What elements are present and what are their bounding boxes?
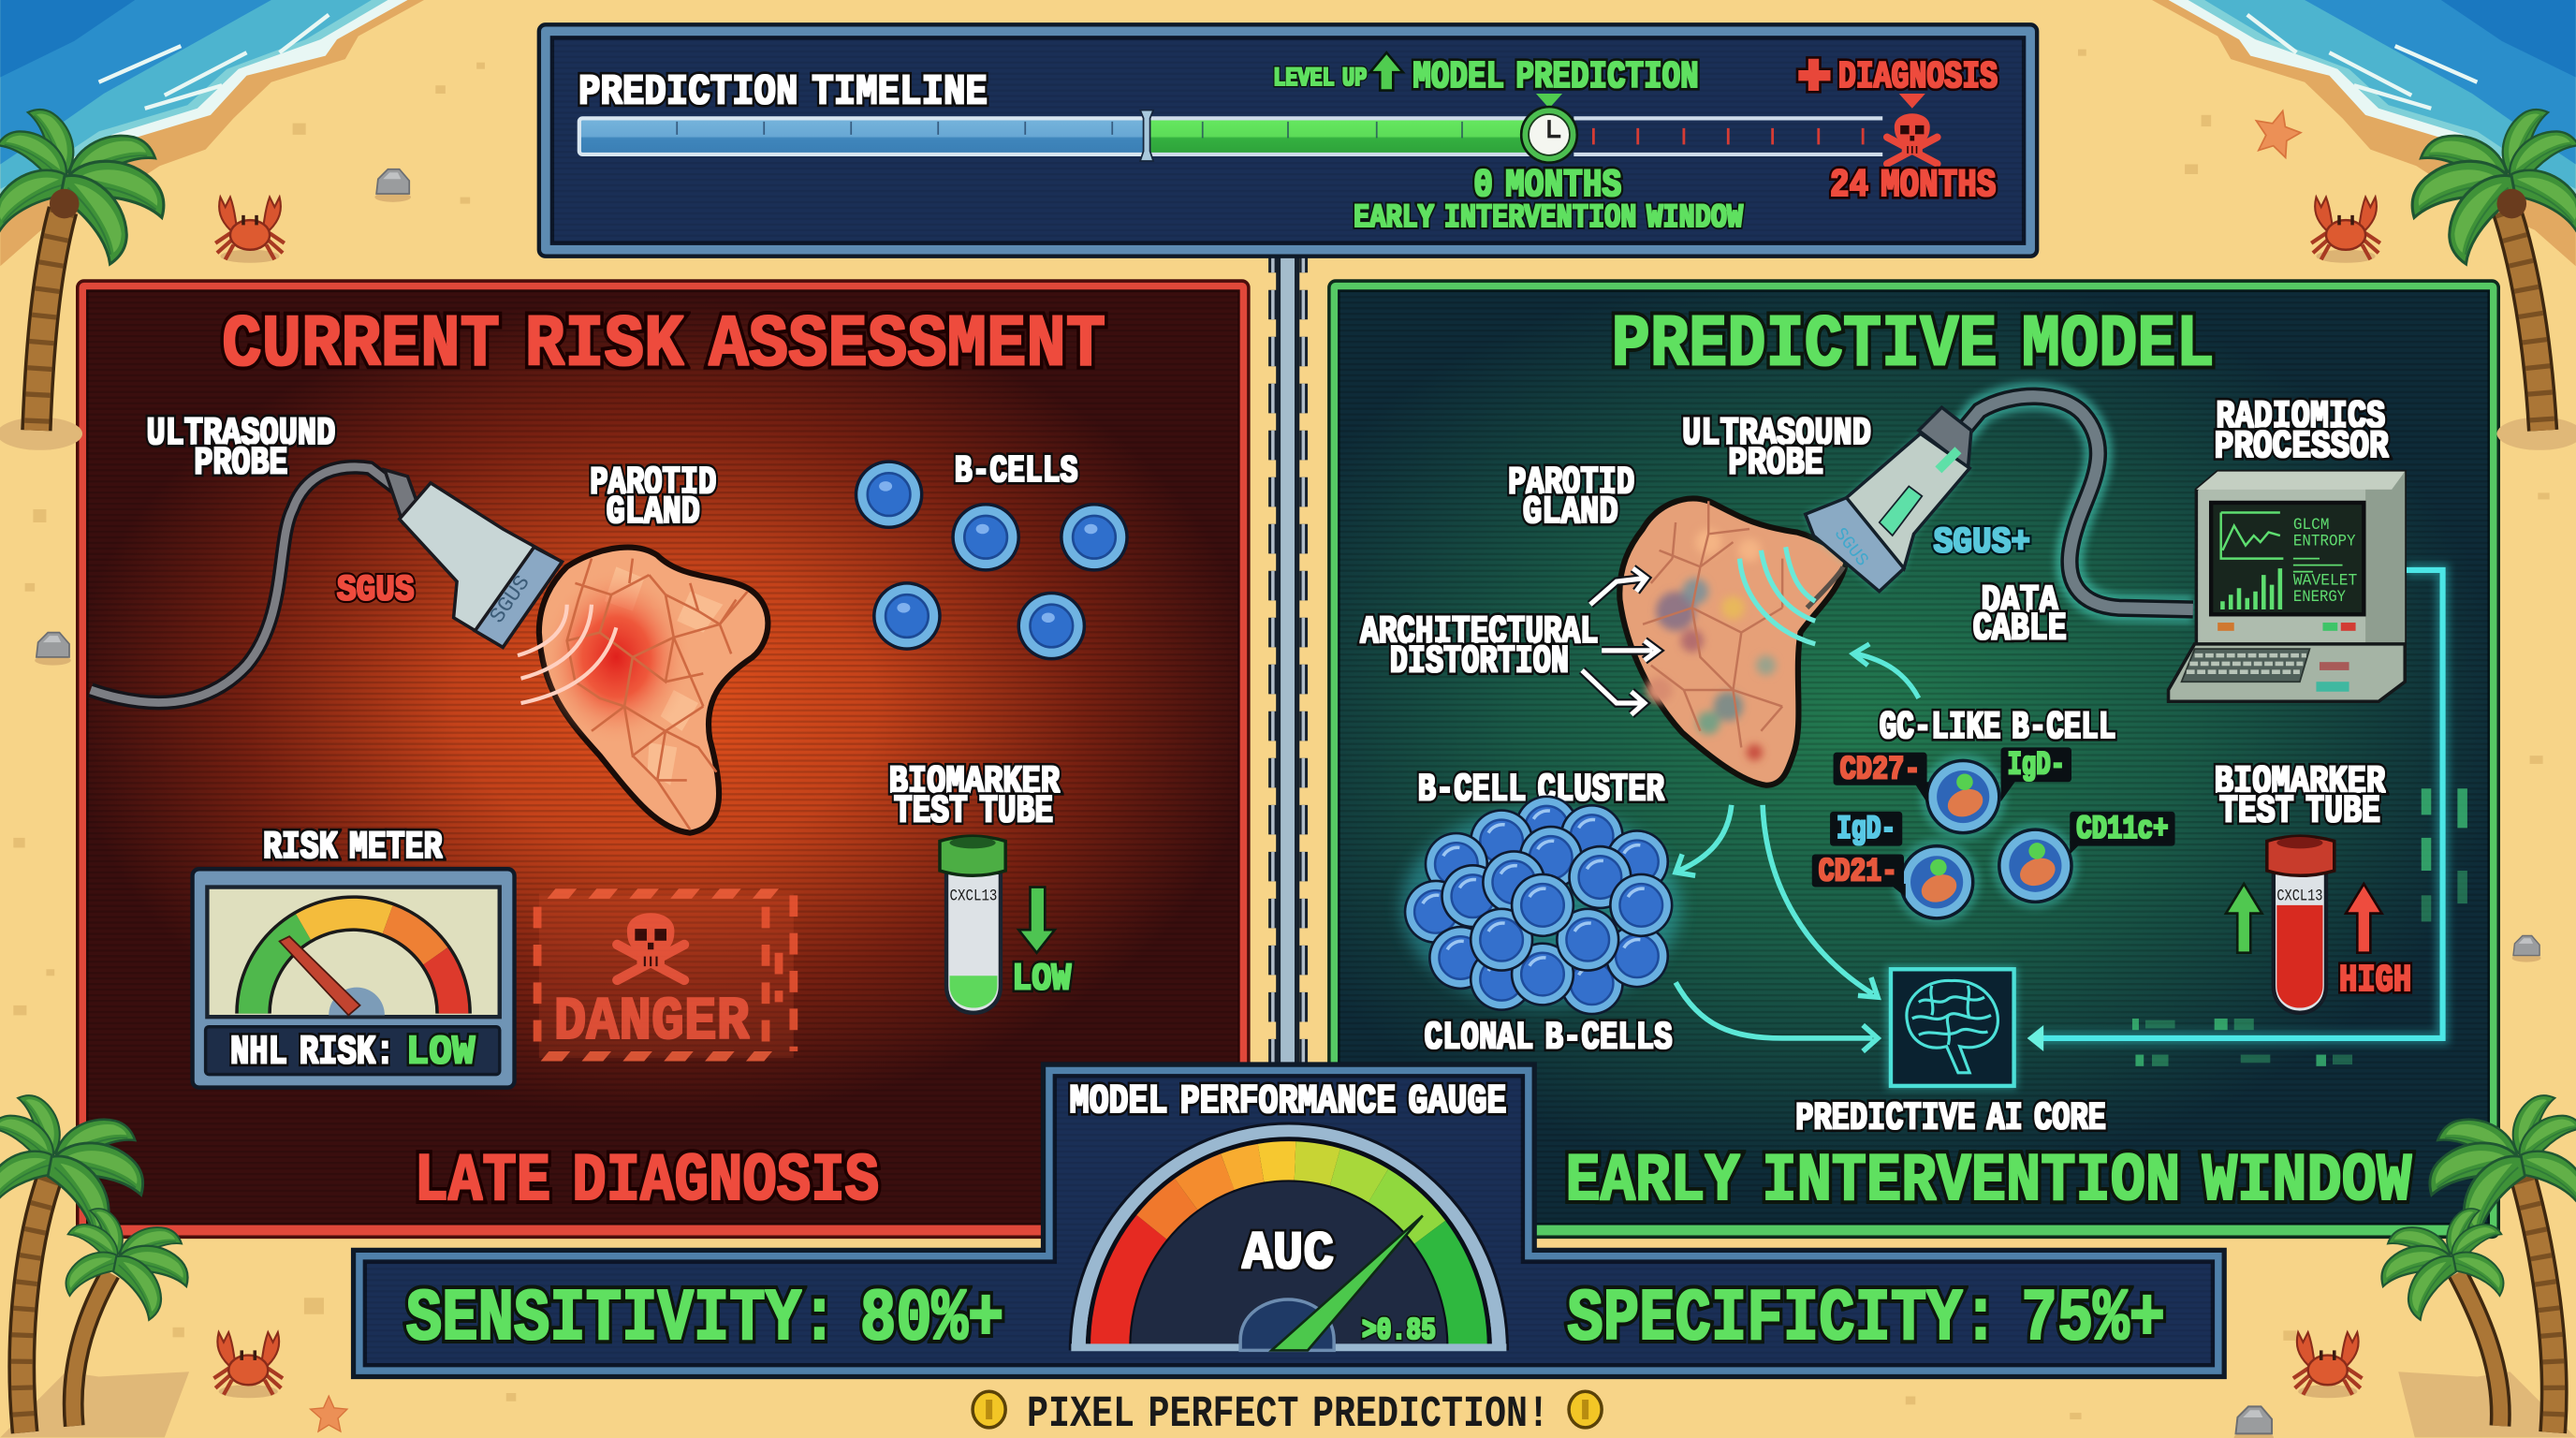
heading: current risk assessment: CURRENT RISK ASSESSMENT [222, 303, 1105, 388]
panel: prediction timeline [539, 24, 2037, 257]
tag: CD11c+ [2070, 811, 2175, 854]
label: risk meter: RISK METER [263, 825, 443, 870]
icon: test tube low: CXCL13 [950, 888, 997, 906]
label: biomarker test tube: BIOMARKER [2215, 759, 2386, 804]
icon: radiomics computer: WAVELET [2293, 572, 2357, 591]
data bits [2132, 788, 2467, 1066]
marker: diagnosis [1899, 94, 1925, 109]
label: radiomics processor: RADIOMICS [2216, 394, 2385, 439]
GC-like b-cells [1894, 754, 2078, 925]
label: ultrasound probe: ULTRASOUND [1682, 411, 1871, 456]
tag: IgD- cyan: IgD- [1837, 811, 1895, 848]
label: SGUS: SGUS [337, 569, 414, 610]
icon: b-cells [855, 460, 1129, 660]
tag: CD27- [1834, 752, 1928, 805]
icon: radiomics computer: GLCM [2293, 516, 2329, 535]
icon: predictive AI core [1886, 966, 2017, 1089]
label: architectural distortion [1360, 609, 1599, 684]
icon: ultrasound probe: SGUS [485, 571, 535, 628]
heading: predictive model: PREDICTIVE MODEL [1612, 303, 2215, 388]
arrow: red up [2346, 884, 2382, 953]
danger warning: DANGER [554, 989, 749, 1057]
icon: clock [1521, 107, 1577, 163]
label: early intervention window: EARLY INTERVENTION WINDOW [1354, 199, 1744, 237]
metric: sensitivity: SENSITIVITY: 80%+ [406, 1277, 1003, 1361]
label: NHL risk low: NHL RISK: [230, 1029, 394, 1076]
AUC gauge [1071, 1132, 1506, 1351]
risk meter [193, 869, 515, 1088]
tag: IgD- green: IgD- [2008, 746, 2065, 784]
arrow: green up [2226, 884, 2262, 953]
icon: ultrasound probe glowing [1806, 407, 1971, 592]
footer: late diagnosis: LATE DIAGNOSIS [414, 1143, 879, 1220]
label: high: HIGH [2339, 960, 2411, 1003]
panel: current risk assessment [78, 281, 1249, 1237]
label: radiomics processor: PROCESSOR [2215, 424, 2389, 469]
label: parotid gland [590, 460, 716, 535]
label: 24 months: 24 MONTHS [1830, 163, 1996, 208]
vertical connector chain [1273, 243, 1304, 1068]
label: ultrasound probe: ULTRASOUND [146, 411, 335, 456]
label: 0 months: 0 MONTHS [1473, 163, 1621, 208]
tag: IgD- green [2001, 746, 2071, 801]
panel: predictive model [1329, 281, 2498, 1237]
label: parotid gland [1508, 460, 1634, 535]
footer: early intervention window: EARLY INTERVENTION WINDOW [1566, 1143, 2412, 1220]
marker: model prediction [1536, 94, 1562, 109]
label: biomarker test tube [2215, 759, 2386, 833]
icon: test tube low [940, 836, 1005, 1013]
icon: level up arrow [1370, 52, 1403, 91]
danger warning [537, 888, 794, 1062]
panel: model performance [354, 1064, 2224, 1376]
label: ultrasound probe: PROBE [1728, 440, 1823, 485]
label: parotid gland: PAROTID [1508, 460, 1634, 505]
heading: prediction timeline: PREDICTION TIMELINE [578, 68, 988, 117]
icon: diagnosis skull [1887, 113, 1938, 164]
icon: radiomics computer [2169, 472, 2405, 701]
label: ultrasound probe: PROBE [194, 440, 287, 485]
label: biomarker test tube: TEST TUBE [2219, 788, 2380, 833]
icon: radiomics computer: ENTROPY [2293, 533, 2356, 551]
label: ultrasound probe [146, 411, 335, 485]
data line to AI core [2027, 570, 2443, 1051]
icon: coin right [1569, 1391, 1602, 1428]
metric: specificity: SPECIFICITY: 75%+ [1567, 1277, 2165, 1361]
label: parotid gland: GLAND [1523, 490, 1618, 535]
arrows: architectural distortion [1582, 568, 1658, 714]
label: biomarker test tube: TEST TUBE [894, 788, 1053, 833]
tag: CD21-: CD21- [1819, 854, 1897, 891]
palm trees: bottom left [0, 1087, 195, 1437]
icon: ultrasound probe [385, 470, 562, 647]
palm trees: bottom right [2375, 1087, 2576, 1437]
timeline bar [579, 110, 1882, 161]
arrows to AI core [1676, 805, 1878, 1051]
label: architectural distortion: DISTORTION [1390, 639, 1569, 684]
icon: parotid gland distorted [1619, 499, 1847, 785]
label: parotid gland: PAROTID [590, 460, 716, 505]
arrow: low [1018, 888, 1055, 953]
label: data cable [1973, 579, 2067, 652]
label: SGUS+: SGUS+ [1934, 522, 2030, 564]
palm tree: top right [2403, 100, 2576, 450]
label: data cable: DATA [1981, 579, 2059, 624]
label: predictive AI core: PREDICTIVE AI CORE [1795, 1095, 2106, 1140]
ocean: top left [0, 0, 424, 266]
label: b-cells: B-CELLS [955, 450, 1077, 493]
icon: radiomics computer: ENERGY [2293, 588, 2346, 607]
label: ultrasound probe [1682, 411, 1871, 485]
data cable [1954, 396, 2193, 609]
label: architectural distortion: ARCHITECTURAL [1360, 609, 1599, 654]
icon: test tube high: CXCL13 [2276, 888, 2322, 906]
label: biomarker test tube: BIOMARKER [889, 759, 1061, 804]
label: parotid gland: GLAND [607, 490, 700, 535]
icon: diagnosis plus [1797, 57, 1832, 92]
label: greater than 0.85: >0.85 [1362, 1313, 1436, 1349]
icon: b-cell cluster [1401, 795, 1680, 1015]
ocean: top right [2152, 0, 2576, 266]
label: model prediction: MODEL PREDICTION [1412, 56, 1699, 99]
arrow: cell to gland [1853, 644, 1919, 698]
label: clonal b-cells: CLONAL B-CELLS [1425, 1016, 1673, 1061]
palm tree: top left [0, 100, 173, 450]
label: b-cell cluster: B-CELL CLUSTER [1418, 768, 1664, 813]
gauge needle [1271, 1215, 1423, 1350]
heading: model performance gauge: MODEL PERFORMANCE GAUGE [1070, 1078, 1506, 1125]
label: NHL risk low: LOW [406, 1029, 476, 1076]
icon: parotid gland [518, 548, 768, 833]
label: biomarker test tube [889, 759, 1061, 833]
label: low: LOW [1012, 958, 1072, 1001]
label: level up: LEVEL UP [1273, 65, 1367, 94]
label: radiomics processor [2215, 394, 2389, 469]
tag: CD11c+: CD11c+ [2076, 811, 2169, 848]
icon: coin left [973, 1391, 1005, 1428]
probe cable [91, 467, 398, 702]
label: AUC: AUC [1242, 1225, 1334, 1285]
icon: ultrasound probe glowing: SGUS [1830, 524, 1872, 570]
label: data cable: CABLE [1973, 607, 2067, 652]
label: diagnosis: DIAGNOSIS [1838, 56, 1998, 99]
icon: test tube high [2267, 836, 2334, 1013]
label: GC-like b-cell: GC-LIKE B-CELL [1880, 705, 2115, 750]
tag: CD27-: CD27- [1840, 752, 1921, 789]
banner: pixel perfect prediction [973, 1390, 1602, 1438]
